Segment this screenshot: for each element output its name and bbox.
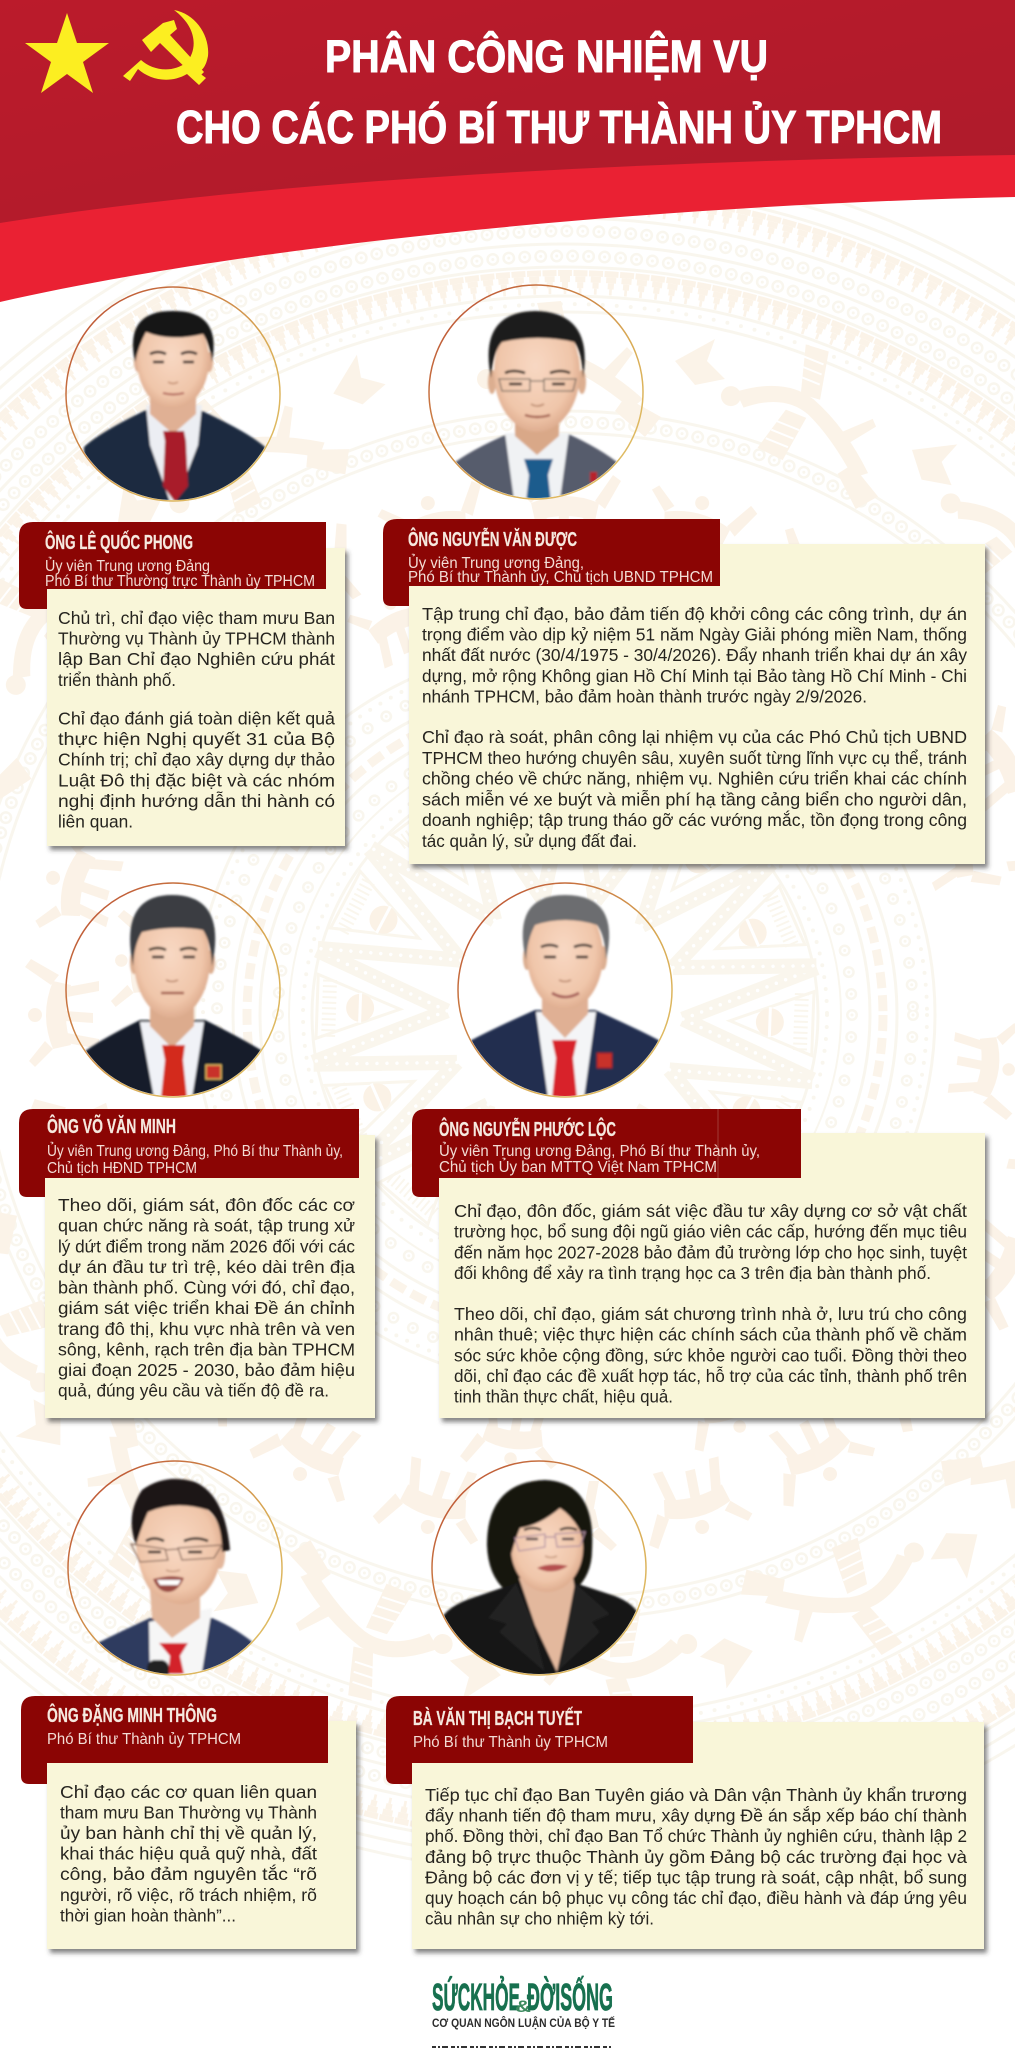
assignment text: triển thành phố. — [58, 670, 176, 690]
bright red swoosh — [0, 100, 1015, 302]
assignment text — [60, 1782, 317, 1925]
header banner — [0, 0, 1015, 302]
card body — [47, 1721, 356, 1949]
name tag: ÔNG LÊ QUỐC PHONG — [45, 530, 193, 554]
assignment text: tinh thần thực chất, hiệu quả. — [454, 1387, 673, 1407]
portrait: Đặng Minh Thông — [68, 1461, 282, 1682]
logo: Sức Khỏe & Đời Sống — [425, 1972, 620, 2047]
assignment text: Chính trị; chỉ đạo xây dựng dự thảo — [58, 750, 335, 770]
assignment text — [422, 604, 967, 851]
name tag: Phó Bí thư Thành ủy, Chủ tịch UBND TPHCM — [408, 569, 713, 586]
assignment text: Chỉ đạo đánh giá toàn diện kết quả — [58, 708, 335, 728]
icon: yellow star — [25, 13, 109, 93]
assignment text: Luật Đô thị đặc biệt và các nhóm — [58, 770, 335, 790]
assignment text: bàn thành phố. Cùng với đó, chỉ đạo, — [58, 1278, 355, 1298]
assignment text: sông, kênh, rạch trên địa bàn TPHCM — [58, 1339, 355, 1359]
assignment text: đẩy nhanh tiến độ tham mưu, xây dựng Đề án sắp xếp báo chí thành — [425, 1806, 967, 1826]
assignment text: Tập trung chỉ đạo, bảo đảm tiến độ khởi công các công trình, dự án — [422, 604, 967, 624]
title line 1: PHÂN CÔNG NHIỆM VỤ — [325, 31, 768, 82]
name tag — [386, 1696, 693, 1784]
assignment text — [425, 1785, 967, 1929]
assignment text: khai thác hiệu quả quỹ nhà, đất — [60, 1844, 317, 1864]
assignment text: Thường vụ Thành ủy TPHCM thành — [58, 629, 335, 649]
assignment text: phố. Đồng thời, chỉ đạo Ban Tổ chức Thành ủy nghiên cứu, thành lập 2 — [425, 1826, 967, 1846]
assignment text: dõi, chỉ đạo các đề xuất hợp tác, hỗ trợ của các tỉnh, thành phố trên — [454, 1366, 967, 1386]
card body — [439, 1133, 985, 1418]
name tag: Chủ tịch HĐND TPHCM — [47, 1160, 197, 1177]
dark red banner — [0, 0, 1015, 223]
assignment text: sóc sức khỏe cộng đồng, sức khỏe người cao tuổi. Đồng thời theo — [454, 1345, 967, 1365]
name tag: ÔNG VÕ VĂN MINH — [47, 1114, 176, 1138]
assignment text: Theo dõi, giám sát, đôn đốc các cơ — [58, 1195, 355, 1215]
assignment text: dựng, mở rộng Không gian Hồ Chí Minh tại Bảo tàng Hồ Chí Minh - Chi — [422, 666, 967, 686]
assignment text: người, rõ việc, rõ trách nhiệm, rõ — [60, 1885, 317, 1905]
logo: Sức Khỏe & Đời Sống: CƠ QUAN NGÔN LUẬN CỦA BỘ Y TẾ — [432, 2017, 615, 2030]
card body — [47, 548, 345, 846]
card body — [412, 1722, 984, 1949]
assignment text: Tiếp tục chỉ đạo Ban Tuyên giáo và Dân vận Thành ủy khẩn trương — [425, 1785, 967, 1805]
card body — [409, 544, 985, 864]
assignment text — [454, 1201, 967, 1407]
name tag: Phó Bí thư Thành ủy TPHCM — [47, 1731, 241, 1748]
assignment text: lý dứt điểm trong năm 2026 đối với các — [58, 1236, 355, 1256]
name tag: BÀ VĂN THỊ BẠCH TUYẾT — [413, 1707, 582, 1730]
assignment text: lập Ban Chỉ đạo Nghiên cứu phát — [58, 649, 335, 669]
panel: Nguyễn Văn Được — [383, 285, 985, 864]
assignment text: cầu nhân sự cho nhiệm kỳ tới. — [425, 1909, 654, 1929]
icon: hammer and sickle — [123, 10, 208, 85]
assignment text: thời gian hoàn thành”... — [60, 1905, 236, 1925]
assignment text: thực hiện Nghị quyết 31 của Bộ — [58, 729, 335, 749]
assignment text: trang đô thị, khu vực nhà trên và ven — [58, 1319, 355, 1339]
assignment text: giai đoạn 2025 - 2030, bảo đảm hiệu — [58, 1360, 355, 1380]
logo: Sức Khỏe & Đời Sống: SỨCKHỎE — [432, 1975, 520, 2019]
name tag — [19, 522, 326, 609]
name tag: Chủ tịch Ủy ban MTTQ Việt Nam TPHCM — [439, 1158, 717, 1176]
assignment text: quy hoạch cán bộ phục vụ công tác chỉ đạo, điều hành và đáp ứng yêu — [425, 1888, 967, 1908]
assignment text: quả, đúng yêu cầu và tiến độ đề ra. — [58, 1381, 329, 1401]
assignment text: Chỉ đạo rà soát, phân công lại nhiệm vụ của các Phó Chủ tịch UBND — [422, 727, 967, 747]
assignment text: tham mưu Ban Thường vụ Thành — [60, 1803, 317, 1823]
assignment text: doanh nghiệp; tập trung tháo gỡ các vướng mắc, tồn đọng trong công — [422, 810, 967, 830]
name tag — [19, 1109, 359, 1197]
name tag: Ủy viên Trung ương Đảng, — [408, 554, 584, 572]
panel: Lê Quốc Phong — [19, 287, 345, 846]
name tag: Ủy viên Trung ương Đảng, Phó Bí thư Thành ủy, — [47, 1142, 343, 1160]
logo: Sức Khỏe & Đời Sống: ĐỜISỐNG — [527, 1974, 613, 2019]
assignment text: nghị định hướng dẫn thi hành có — [58, 791, 335, 811]
assignment text: nhất đất nước (30/4/1975 - 30/4/2026). Đẩy nhanh triển khai dự án xây — [422, 645, 967, 665]
assignment text: tác quản lý, sử dụng đất đai. — [422, 831, 637, 851]
assignment text — [58, 608, 335, 832]
panel: Nguyễn Phước Lộc — [412, 883, 985, 1418]
assignment text: giám sát việc triển khai Đề án chỉnh — [58, 1298, 355, 1318]
card body — [45, 1135, 375, 1418]
assignment text: ủy ban hành chỉ thị về quản lý, — [60, 1823, 317, 1843]
name tag — [21, 1696, 328, 1784]
panel: Võ Văn Minh — [19, 883, 375, 1418]
portrait: Nguyễn Phước Lộc — [458, 883, 672, 1100]
assignment text: TPHCM theo hướng chuyên sâu, xuyên suốt từng lĩnh vực cụ thể, tránh — [422, 748, 967, 768]
assignment text: công, bảo đảm nguyên tắc “rõ — [60, 1864, 317, 1884]
name tag: Ủy viên Trung ương Đảng, Phó Bí thư Thành ủy, — [439, 1142, 760, 1160]
panel: Văn Thị Bạch Tuyết — [386, 1461, 984, 1949]
assignment text: sách miễn vé xe buýt và miễn phí hạ tầng cảng biển cho người dân, — [422, 789, 967, 809]
assignment text: liên quan. — [58, 812, 133, 832]
name tag — [412, 1109, 801, 1197]
assignment text: Đảng bộ các đơn vị y tế; tiếp tục tập trung rà soát, cập nhật, bổ sung — [425, 1867, 967, 1887]
assignment text: trường học, bổ sung đội ngũ giáo viên các cấp, hướng đến mục tiêu — [454, 1222, 967, 1242]
assignment text: Chỉ đạo, đôn đốc, giám sát việc đầu tư xây dựng cơ sở vật chất — [454, 1201, 967, 1221]
name tag: Phó Bí thư Thành ủy TPHCM — [413, 1734, 608, 1751]
logo: Sức Khỏe & Đời Sống: & — [515, 1997, 531, 2016]
name tag: Ủy viên Trung ương Đảng — [45, 557, 210, 575]
assignment text: Chỉ đạo các cơ quan liên quan — [60, 1782, 317, 1802]
portrait: Nguyễn Văn Được — [429, 285, 643, 502]
portrait: Lê Quốc Phong — [66, 287, 280, 505]
portrait: Võ Văn Minh — [66, 883, 280, 1100]
name tag: ÔNG NGUYỄN PHƯỚC LỘC — [439, 1117, 616, 1141]
assignment text — [58, 1195, 355, 1401]
name tag: Phó Bí thư Thường trực Thành ủy TPHCM — [45, 573, 315, 590]
assignment text: đến năm học 2027-2028 bảo đảm đủ trường lớp cho học sinh, tuyệt — [454, 1242, 967, 1262]
assignment text: Chủ trì, chỉ đạo việc tham mưu Ban — [58, 608, 335, 628]
name tag — [383, 519, 720, 606]
assignment text: chồng chéo về chức năng, nhiệm vụ. Nghiên cứu triển khai các chính — [422, 769, 967, 789]
assignment text: dự án đầu tư trì trệ, kéo dài trên địa — [58, 1257, 355, 1277]
assignment text: quan chức năng rà soát, tập trung xử — [58, 1216, 355, 1236]
portrait: Văn Thị Bạch Tuyết — [432, 1461, 646, 1690]
name tag: ÔNG ĐẶNG MINH THÔNG — [47, 1703, 217, 1727]
assignment text: trọng điểm vào dịp kỷ niệm 51 năm Ngày Giải phóng miền Nam, thống — [422, 625, 967, 645]
assignment text: đảng bộ trực thuộc Thành ủy gồm Đảng bộ các trường đại học và — [425, 1847, 967, 1867]
assignment text: nhánh TPHCM, bảo đảm hoàn thành trước ngày 2/9/2026. — [422, 686, 867, 706]
assignment text: đối không để xảy ra tình trạng học ca 3 trên địa bàn thành phố. — [454, 1263, 931, 1283]
assignment text: Theo dõi, chỉ đạo, giám sát chương trình nhà ở, lưu trú cho công — [454, 1304, 967, 1324]
assignment text: nhân thuê; việc thực hiện các chính sách của thành phố về chăm — [454, 1325, 967, 1345]
panel: Đặng Minh Thông — [21, 1461, 356, 1949]
name tag: ÔNG NGUYỄN VĂN ĐƯỢC — [408, 527, 577, 551]
